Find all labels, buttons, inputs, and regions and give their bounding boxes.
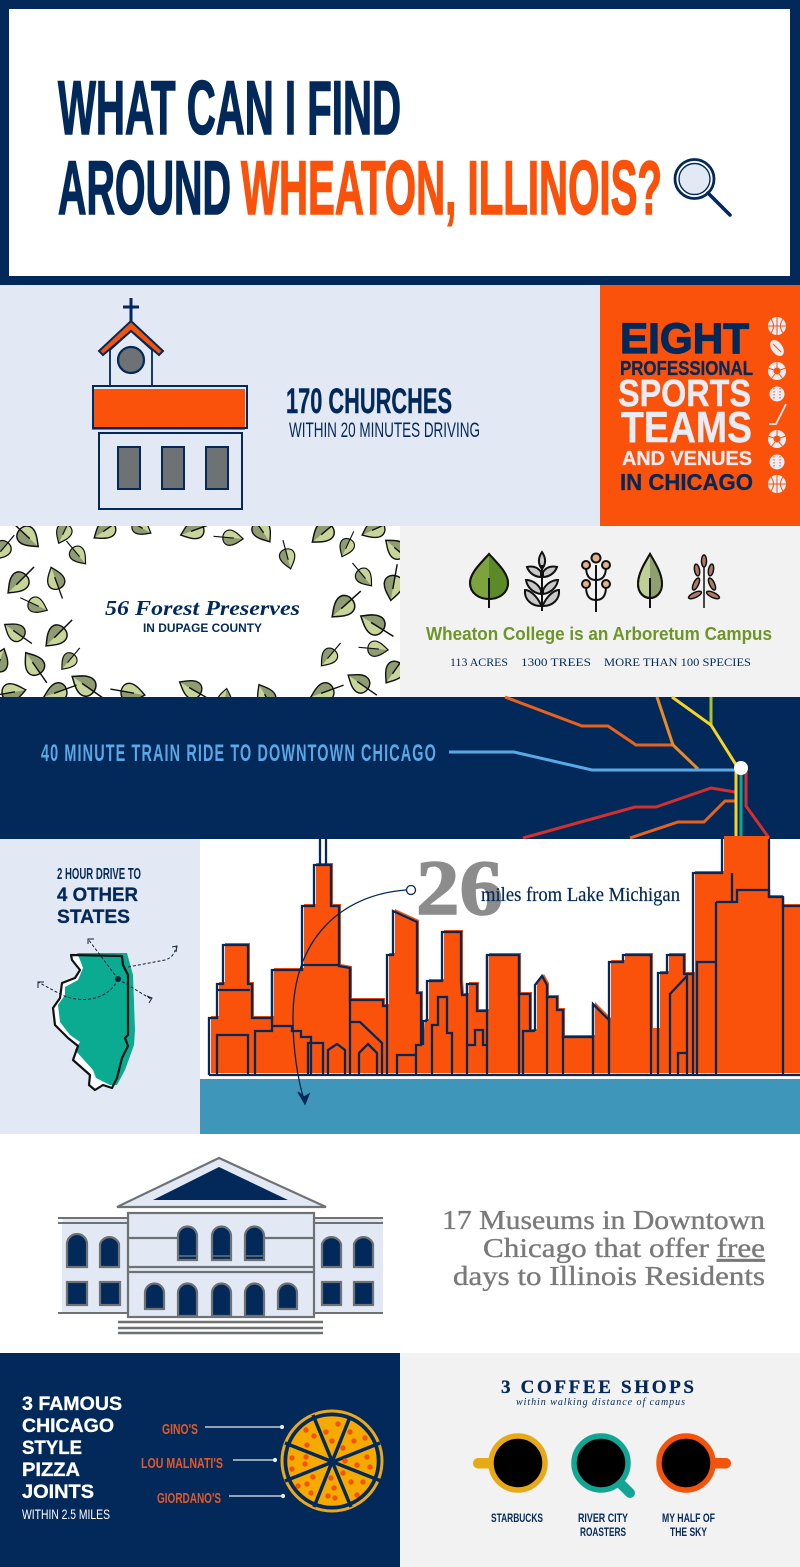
- label: my half of the sky: [662, 1511, 715, 1539]
- dashed arrows: [38, 939, 177, 1003]
- big number 26: 26: [416, 844, 503, 931]
- sports text: EIGHT: [620, 315, 749, 363]
- panel: churches: [0, 285, 600, 526]
- panel: lake michigan skyline: [200, 836, 800, 1134]
- lake michigan label: miles from Lake Michigan: [481, 884, 680, 906]
- title line one: WHAT CAN I FIND: [58, 66, 401, 151]
- label: my half of the sky: THE SKY: [670, 1525, 707, 1539]
- pizza heading: JOINTS: [22, 1482, 94, 1503]
- pointer lines: [205, 1426, 284, 1498]
- other states line one: 4 OTHER: [57, 885, 138, 906]
- pizza heading: STYLE: [22, 1438, 82, 1459]
- pizza heading: PIZZA: [22, 1460, 80, 1481]
- pizza distance: WITHIN 2.5 MILES: [22, 1506, 110, 1522]
- train heading: 40 MINUTE TRAIN RIDE TO DOWNTOWN CHICAGO: [41, 740, 436, 767]
- sports text: TEAMS: [621, 403, 752, 452]
- panel: train: [0, 697, 800, 839]
- map: illinois: [38, 939, 177, 1090]
- sports text: SPORTS: [618, 373, 751, 415]
- county label: IN DUPAGE COUNTY: [143, 621, 262, 635]
- leaf border: [0, 526, 400, 697]
- label: gino's: GINO'S: [162, 1422, 198, 1438]
- arboretum heading: Wheaton College is an Arboretum Campus: [426, 623, 772, 644]
- sports text: IN CHICAGO: [620, 469, 753, 495]
- distance arc arrow: [293, 886, 416, 1104]
- label: river city roasters: RIVER CITY: [578, 1511, 628, 1525]
- icon: starbucks cup: [473, 1436, 545, 1490]
- stat: trees: 1300 TREES: [521, 655, 591, 669]
- transit map lines: [449, 697, 769, 838]
- title line two navy: AROUND: [58, 146, 231, 231]
- stat: acres: 113 ACRES: [450, 655, 508, 669]
- coffee subheading: within walking distance of campus: [516, 1397, 685, 1408]
- label: starbucks: STARBUCKS: [491, 1511, 543, 1525]
- label: river city roasters: [578, 1511, 628, 1539]
- drive time: 2 HOUR DRIVE TO: [57, 866, 141, 883]
- label: giordano's: GIORDANO'S: [157, 1491, 221, 1507]
- icon: river city cup: [574, 1436, 630, 1493]
- church distance: WITHIN 20 MINUTES DRIVING: [289, 419, 480, 442]
- label: my half of the sky: MY HALF OF: [662, 1511, 715, 1525]
- skyline: [209, 836, 800, 1075]
- icon: my half of the sky cup: [659, 1436, 731, 1490]
- panel: other states: [0, 839, 200, 1134]
- museums text: days to Illinois Residents: [453, 1261, 765, 1291]
- icons: sports balls: [767, 316, 787, 494]
- church count: 170 CHURCHES: [286, 382, 452, 421]
- label: river city roasters: ROASTERS: [580, 1525, 626, 1539]
- sports text: AND VENUES: [622, 448, 752, 470]
- sports text: PROFESSIONAL: [620, 358, 753, 380]
- lake water: [200, 1079, 800, 1134]
- icon: magnifying glass: [675, 160, 730, 215]
- stat: species: MORE THAN 100 SPECIES: [604, 655, 751, 669]
- header panel: [0, 0, 800, 285]
- pizza heading: 3 FAMOUS: [22, 1394, 122, 1415]
- icons: trees: [470, 552, 720, 612]
- icon: church: [92, 298, 247, 509]
- panel: museums: [0, 1134, 800, 1353]
- sports text: [618, 315, 753, 495]
- station dot: [734, 761, 748, 775]
- panel: sports teams: [600, 285, 800, 526]
- other states line two: STATES: [57, 907, 130, 928]
- panel: pizza: [0, 1353, 400, 1567]
- museums text: [442, 1205, 766, 1291]
- pizza heading: [22, 1394, 122, 1503]
- label: lou malnati's: LOU MALNATI'S: [141, 1456, 223, 1472]
- icon: pizza: [282, 1411, 382, 1511]
- skyline inner lines: [217, 839, 783, 1075]
- museums text: 17 Museums in Downtown: [442, 1205, 766, 1235]
- forest preserves heading: 56 Forest Preserves: [105, 596, 300, 620]
- pizza heading: CHICAGO: [22, 1416, 114, 1437]
- icon: museum building: [58, 1158, 383, 1333]
- panel: forest preserves: [0, 526, 400, 697]
- panel: arboretum: [400, 526, 800, 697]
- panel: coffee: [400, 1353, 800, 1567]
- museums text: Chicago that offer free: [483, 1233, 765, 1263]
- coffee heading: 3 COFFEE SHOPS: [501, 1377, 694, 1398]
